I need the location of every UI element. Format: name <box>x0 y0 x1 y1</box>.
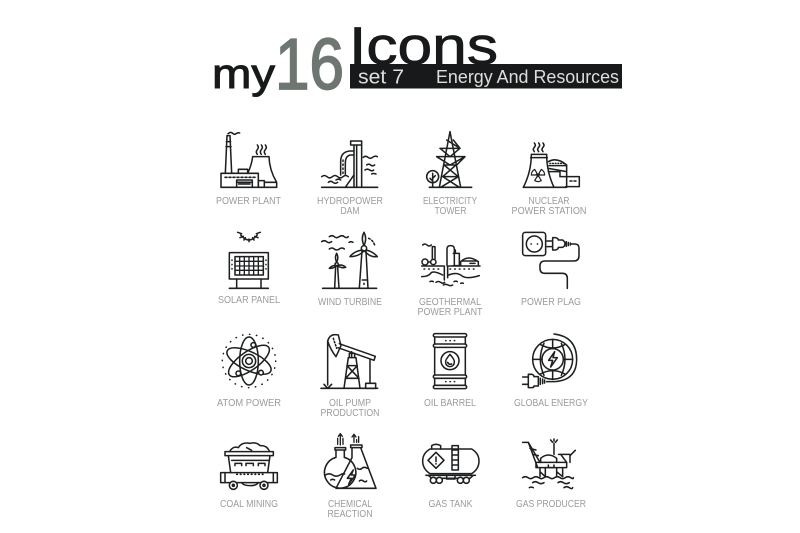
item: power plant <box>216 132 281 207</box>
icon: gas producer <box>523 439 575 489</box>
icon: gas tank <box>423 444 479 483</box>
icon: chemical reaction <box>324 434 376 488</box>
label: HYDROPOWER DAM <box>317 196 383 217</box>
label: CHEMICAL REACTION <box>328 499 372 520</box>
item: power plug <box>521 232 581 308</box>
label: OIL PUMP PRODUCTION <box>320 398 380 419</box>
icon: global energy <box>523 334 577 388</box>
title <box>212 17 622 105</box>
label: POWER PLANT: POWER PLANT <box>216 196 281 207</box>
title word: my: my <box>212 50 275 97</box>
item: oil pump <box>320 335 380 419</box>
label: POWER PLAG: POWER PLAG <box>521 297 581 308</box>
label: ELECTRICITY TOWER: ELECTRICITY <box>423 196 477 207</box>
icon: solar panel <box>229 232 268 288</box>
title word: Icons: Icons <box>349 17 498 76</box>
subtitle bar <box>350 64 622 88</box>
icon: geothermal power plant <box>422 244 480 286</box>
item: chemical reaction <box>324 434 376 520</box>
icon: coal mining <box>221 443 277 489</box>
label: GLOBAL ENERGY: GLOBAL ENERGY <box>514 398 588 409</box>
label: GEOTHERMAL POWER PLANT: POWER PLANT <box>418 307 482 318</box>
item: geothermal power plant <box>418 244 482 318</box>
icon: atom power <box>222 334 276 388</box>
label: OIL PUMP PRODUCTION: PRODUCTION <box>320 408 380 419</box>
icon: electricity tower <box>427 132 472 187</box>
icon: oil pump production <box>321 335 378 388</box>
label: NUCLEAR POWER STATION: NUCLEAR <box>528 196 570 207</box>
icon: hydropower dam <box>322 141 378 187</box>
title number: 16: 16 <box>275 25 344 105</box>
label: HYDROPOWER DAM: HYDROPOWER <box>317 196 383 207</box>
subtitle: set 7: set 7 <box>358 66 404 88</box>
label: GAS TANK: GAS TANK <box>428 499 473 510</box>
label: ELECTRICITY TOWER: TOWER <box>434 206 466 217</box>
label: COAL MINING: COAL MINING <box>220 499 278 510</box>
item: hydropower dam <box>317 141 383 217</box>
item: oil barrel <box>424 334 476 409</box>
icon: oil barrel <box>433 334 467 389</box>
item: nuclear power station <box>512 143 586 217</box>
label: ATOM POWER: ATOM POWER <box>217 398 281 409</box>
label: OIL PUMP PRODUCTION: OIL PUMP <box>329 398 371 409</box>
icon: nuclear power station <box>523 143 579 187</box>
icon: wind turbine <box>322 232 377 288</box>
subtitle: Energy And Resources: Energy And Resources <box>436 67 619 87</box>
label: SOLAR PANEL: SOLAR PANEL <box>218 295 280 306</box>
item: electricity tower <box>423 132 477 217</box>
item: coal mining <box>220 443 278 510</box>
icon: power plant <box>221 132 277 187</box>
label: HYDROPOWER DAM: DAM <box>340 206 360 217</box>
label: GAS PRODUCER: GAS PRODUCER <box>516 499 586 510</box>
item: global energy <box>514 334 588 409</box>
item: gas producer <box>516 439 586 510</box>
item: solar panel <box>218 232 280 306</box>
label: NUCLEAR POWER STATION: POWER STATION <box>512 206 586 217</box>
item: atom power <box>217 334 281 409</box>
label: NUCLEAR POWER STATION <box>512 196 586 217</box>
label: CHEMICAL REACTION: REACTION <box>328 509 372 520</box>
icon: power plug <box>523 232 579 288</box>
label: ELECTRICITY TOWER <box>423 196 477 217</box>
label: GEOTHERMAL POWER PLANT <box>418 297 482 318</box>
label: OIL BARREL: OIL BARREL <box>424 398 476 409</box>
label: CHEMICAL REACTION: CHEMICAL <box>328 499 372 510</box>
item: gas tank <box>423 444 479 510</box>
item: wind turbine <box>318 232 382 308</box>
label: GEOTHERMAL POWER PLANT: GEOTHERMAL <box>419 297 481 308</box>
label: WIND TURBINE: WIND TURBINE <box>318 297 382 308</box>
